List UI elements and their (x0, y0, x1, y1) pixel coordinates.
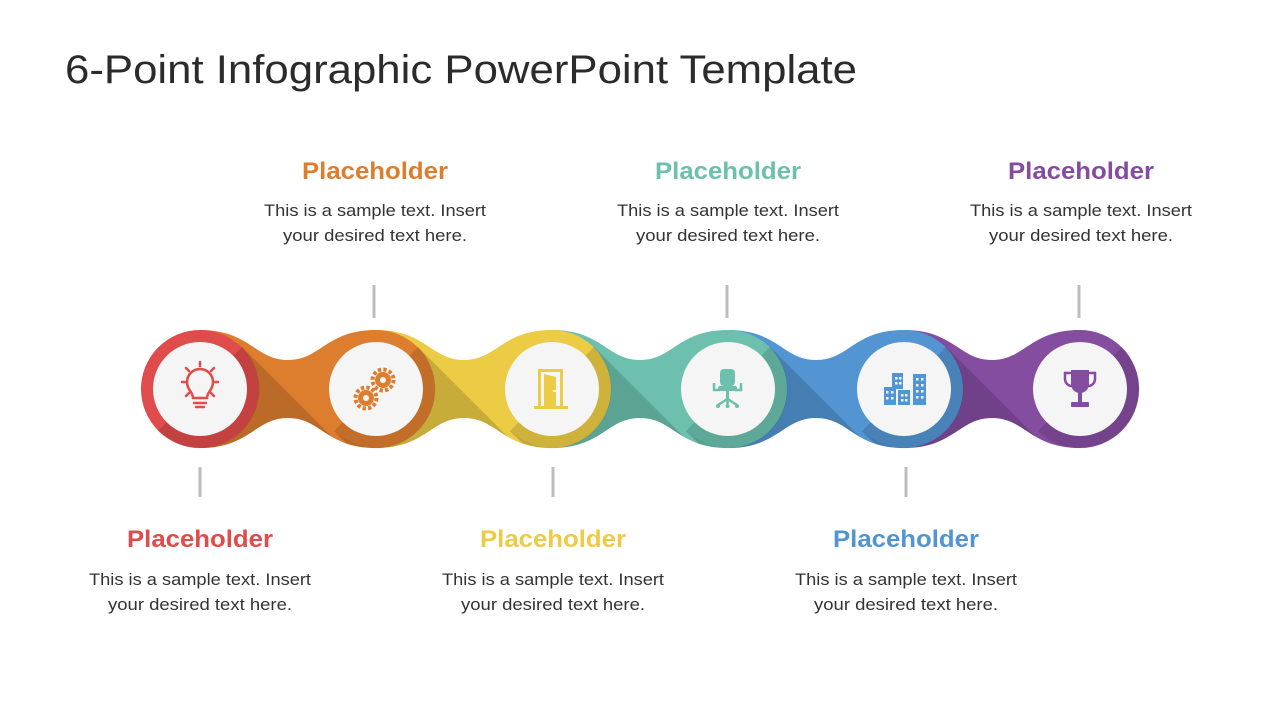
circle 2 orange (317, 330, 435, 448)
icon: trophy (1065, 370, 1095, 407)
text: point 4: your desired text here. (636, 226, 820, 245)
text: point 3 (442, 526, 664, 614)
text: point 4: This is a sample text. Insert (617, 201, 839, 220)
circle 5 blue (845, 330, 963, 448)
text: point 4 (617, 158, 839, 245)
text: point 1: This is a sample text. Insert (89, 570, 311, 589)
text: point 1 (89, 526, 311, 614)
text: point 2: Placeholder (302, 158, 448, 185)
text: point 5: Placeholder (833, 526, 979, 553)
text: point 6: your desired text here. (989, 226, 1173, 245)
segment: purple (904, 330, 1080, 448)
title: 6-Point Infographic PowerPoint Template (65, 48, 857, 92)
text: point 2: This is a sample text. Insert (264, 201, 486, 220)
text: point 6 (970, 158, 1192, 245)
segment: yellow (376, 330, 552, 448)
ticks (200, 285, 1079, 497)
circle 4 teal (669, 330, 787, 448)
segment: teal (552, 330, 728, 448)
text: point 3: This is a sample text. Insert (442, 570, 664, 589)
circle 3 yellow (493, 330, 611, 448)
text: point 5: This is a sample text. Insert (795, 570, 1017, 589)
text: point 3: Placeholder (480, 526, 626, 553)
segment: blue (728, 330, 904, 448)
text: point 6: Placeholder (1008, 158, 1154, 185)
icon: door (534, 369, 568, 409)
circle 1 red (141, 330, 259, 448)
text: point 5 (795, 526, 1017, 614)
text: point 4: Placeholder (655, 158, 801, 185)
icon: gears (356, 370, 394, 408)
text: point 2 (264, 158, 486, 245)
text: point 3: your desired text here. (461, 595, 645, 614)
icon: buildings (884, 373, 926, 405)
circle 6 purple (1021, 330, 1139, 448)
chain diagram (141, 330, 1140, 448)
text: point 2: your desired text here. (283, 226, 467, 245)
text: point 1: your desired text here. (108, 595, 292, 614)
text: point 5: your desired text here. (814, 595, 998, 614)
icon: office chair (714, 369, 741, 408)
text: point 6: This is a sample text. Insert (970, 201, 1192, 220)
segment: orange (200, 330, 376, 448)
shadows (204, 347, 1036, 448)
icon: light bulb (182, 362, 218, 407)
text: point 1: Placeholder (127, 526, 273, 553)
